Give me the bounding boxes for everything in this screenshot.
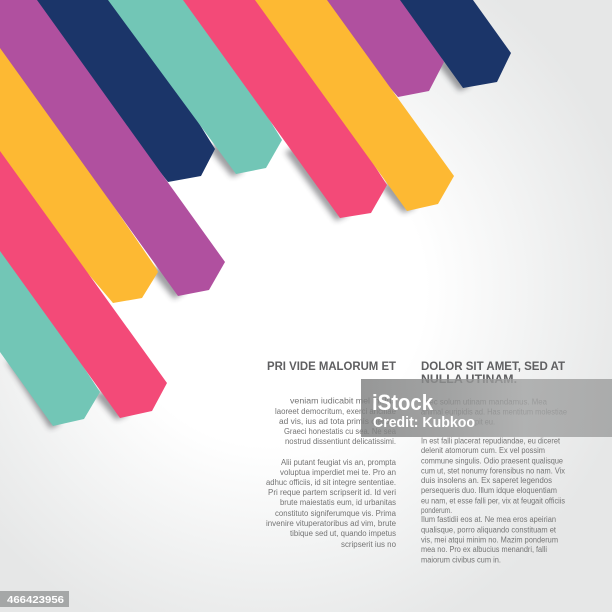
ribbon: orange top	[255, 0, 454, 211]
right column second paragraph: commune singulis. Odio praesent qualisque	[421, 456, 563, 466]
left column first paragraph	[275, 396, 397, 446]
right column third paragraph: Ilum fastidii eos at. Ne mea eros apeirian	[421, 515, 556, 524]
left column heading: PRI VIDE MALORUM ET	[267, 361, 396, 373]
diagonal ribbons	[0, 0, 511, 426]
ribbon: navy	[25, 0, 215, 182]
right column second paragraph: eu nam, et esse falli per, vix at feugait officiis	[421, 496, 565, 506]
right column second paragraph: persequeris duo. Illum idque eloquentiam	[421, 486, 557, 495]
ribbon: purple left	[0, 0, 225, 296]
right column first paragraph	[421, 398, 567, 426]
left column second paragraph: tibique sed ut, quando impetus	[290, 529, 396, 538]
image id tag	[0, 591, 69, 607]
right column third paragraph	[421, 515, 558, 564]
left column second paragraph: adhuc officiis, id sit integre sententiae.	[266, 478, 396, 487]
left column second paragraph: Alii putant feugiat vis an, prompta	[281, 458, 397, 467]
right column first paragraph: animal euripidis ad. Has mentitum molestiae	[421, 408, 567, 416]
left column first paragraph: Graeci honestatis cu sea. Ne sea	[284, 427, 397, 436]
right column third paragraph: qualisque, porro aliquando constituam et	[421, 526, 557, 534]
ribbon: teal top	[108, 0, 282, 174]
left column first paragraph: veniam iudicabit mel in. Ius	[290, 396, 396, 406]
left column second paragraph: brute maiestatis eum, id urbanitas	[280, 498, 396, 507]
left column first paragraph: ad vis, ius ad tota primis cleros.	[279, 417, 396, 426]
ribbon shadows	[6, 56, 470, 429]
right column heading	[421, 361, 565, 386]
left column first paragraph: laoreet democritum, exerci ancillae	[275, 407, 396, 416]
ribbon: pink left	[0, 151, 167, 418]
right column third paragraph: mea no. Pro ex albucius menandri, falli	[421, 545, 547, 554]
left column second paragraph: scripserit ius no	[341, 540, 397, 549]
watermark logo text: iStock	[372, 390, 434, 415]
right column second paragraph: delenit atomorum cum. Ex vel possim	[421, 446, 545, 455]
right column first paragraph: pit eu.	[475, 418, 495, 426]
ribbon: teal left	[0, 240, 100, 426]
ribbon: purple top	[315, 0, 444, 97]
right column second paragraph	[421, 436, 565, 515]
left column first paragraph: nostrud dissentiunt delicatissimi.	[285, 437, 396, 446]
right column heading: NULLA UTINAM.	[421, 374, 517, 386]
right column second paragraph: In est falli placerat repudiandae, eu diceret	[421, 436, 561, 446]
left column second paragraph: invenire vituperatoribus ad vim, brute	[266, 519, 396, 528]
left column second paragraph: voluptua imperdiet mei te. Pro an	[280, 468, 396, 477]
left column second paragraph	[266, 458, 397, 549]
left column second paragraph: Pri reque partem scripserit id. Id veri	[268, 488, 396, 497]
right column heading: DOLOR SIT AMET, SED AT	[421, 361, 565, 373]
left column second paragraph: constituto signiferumque vis. Prima	[275, 509, 397, 518]
right column third paragraph: vis, mei atqui minim no. Mazim ponderum	[421, 536, 558, 544]
watermark credit text: Credit: Kubkoo	[373, 414, 475, 431]
right column second paragraph: cum ut, stet nonumy forensibus no nam. Vix	[421, 466, 565, 476]
ribbon: navy top right	[400, 0, 511, 88]
ribbon: pink top	[183, 0, 387, 218]
right column second paragraph: ponderum.	[421, 506, 452, 515]
right column third paragraph: maiorum civibus cum in.	[421, 556, 501, 564]
right column second paragraph: duis insolens an. Ex saperet legendos	[421, 476, 552, 485]
ribbon: orange left	[0, 40, 158, 303]
image id tag: 466423956	[7, 594, 64, 606]
watermark band	[361, 379, 612, 437]
right column first paragraph: nec solum utinam mandamus. Mea	[425, 398, 548, 406]
